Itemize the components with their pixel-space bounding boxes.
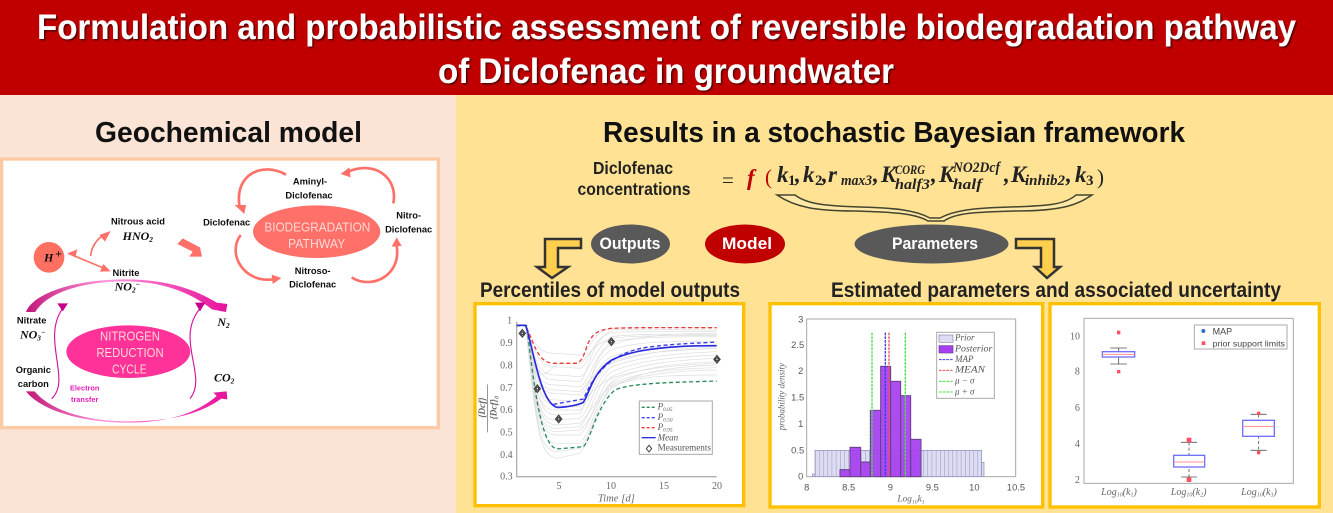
panel: results background: [456, 95, 1333, 513]
formula: ,: [1003, 162, 1010, 187]
axes frame: 8: [1075, 367, 1080, 378]
axes frame: (k: [1123, 487, 1131, 498]
measurements: [519, 330, 720, 423]
biodegradation cycle arrows: [235, 167, 402, 284]
formula: ): [1097, 165, 1104, 189]
heading: percentiles: Percentiles of model outputs: [480, 279, 740, 302]
axes frame: 10: [912, 499, 918, 505]
formula: 1: [788, 173, 796, 189]
formula: r: [828, 162, 838, 187]
nitrogen labels: Nitrous acid: [111, 217, 165, 227]
legend: μ + σ: [954, 386, 975, 396]
legend: 0.05: [663, 407, 673, 413]
axes frame: 10: [1070, 332, 1080, 343]
H+ ion: H: [43, 250, 54, 264]
axes: 0.4: [500, 450, 513, 461]
box k3: [1243, 412, 1274, 454]
axes frame: 2: [798, 366, 803, 376]
legend: [937, 332, 994, 398]
biodegradation pathway ellipse: [253, 205, 380, 258]
axes frame: probability density: [776, 363, 786, 431]
formula: 3: [1086, 173, 1094, 189]
panel: parameter boxplots: [1050, 304, 1319, 507]
ellipse: model: Model: [722, 234, 772, 253]
ellipse: outputs: [591, 224, 670, 264]
formula: CORG: [895, 162, 926, 177]
axes: 0.6: [500, 405, 513, 416]
electron transfer label: Electron: [70, 384, 100, 393]
ellipse: parameters: [854, 224, 1008, 264]
axes: Time [d]: [598, 494, 635, 505]
formula: ,: [930, 162, 937, 187]
legend: [1194, 325, 1287, 349]
axes frame: 9: [888, 482, 893, 492]
nitrous acid and nitrite arrows: [67, 231, 111, 272]
legend: Mean: [657, 432, 679, 442]
axes frame: 1: [798, 419, 803, 429]
nitrogen labels: Organic: [16, 365, 51, 375]
formula: half: [953, 177, 984, 193]
nitrogen labels: Nitrite: [113, 268, 139, 278]
axes frame: 10: [969, 482, 980, 492]
nitrogen labels: 2: [225, 321, 230, 330]
pathway labels: Diclofenac: [285, 191, 333, 201]
axes frame: Log: [1101, 487, 1117, 498]
axes: 0.8: [500, 360, 513, 371]
axes frame: 3: [798, 314, 803, 324]
axes: 1: [507, 315, 512, 326]
axes frame: 9.5: [926, 482, 939, 492]
posterior histogram: [840, 366, 921, 477]
legend: μ − σ: [954, 376, 975, 386]
panel: model outputs chart: [475, 304, 744, 506]
formula: k: [777, 162, 789, 187]
nitrogen labels: carbon: [18, 379, 49, 389]
axes frame: 0: [798, 472, 803, 482]
legend: Measurements: [658, 443, 711, 453]
axes frame: 3: [1269, 493, 1273, 499]
box k2: [1174, 438, 1205, 482]
nitrogen labels: 2: [131, 286, 136, 295]
H+ ion: +: [55, 246, 62, 260]
axes frame: 8.5: [842, 482, 855, 492]
panel: posterior histogram: [770, 304, 1043, 507]
axes frame: 2: [1075, 475, 1080, 486]
nitrogen labels: −: [41, 327, 45, 336]
axes frame: 0.5: [791, 445, 804, 455]
axes: {Dcf}₀: [489, 396, 499, 420]
formula: k: [1075, 162, 1087, 187]
biodegradation pathway ellipse: BIODEGRADATION: [264, 221, 370, 235]
nitrogen cycle bottom arrow: [26, 391, 227, 423]
title text: Formulation and probabilistic assessment of reversible biodegradation pathway: [37, 8, 1296, 47]
formula: [722, 160, 1104, 193]
axes frame: (k: [1263, 487, 1271, 498]
nitrogen cycle top arrow: [26, 279, 227, 312]
pathway labels: Diclofenac: [289, 280, 336, 290]
percentile curves: [517, 325, 717, 449]
nitrogen labels: −: [136, 280, 140, 289]
axes frame: 10: [1257, 493, 1263, 499]
nitrogen reduction ellipse: CYCLE: [112, 362, 147, 376]
axes: 5: [556, 481, 561, 492]
nitrogen labels: NO: [20, 327, 37, 341]
axes frame: [1070, 318, 1293, 499]
axes frame: ): [1272, 487, 1277, 498]
axes frame: 10: [1186, 493, 1192, 499]
electron transfer label: transfer: [71, 395, 98, 404]
legend: MAP: [1213, 327, 1232, 337]
axes frame: ): [1132, 487, 1137, 498]
axes frame: ): [1202, 487, 1207, 498]
formula: ,: [794, 162, 801, 187]
axes frame: 2.5: [791, 340, 804, 350]
axes: 0.3: [500, 472, 513, 483]
axes: 15: [659, 481, 669, 492]
axes frame: 10.5: [1007, 482, 1025, 492]
nitrogen reduction ellipse: REDUCTION: [96, 346, 164, 360]
formula: ,: [1065, 162, 1072, 187]
panel: geochemical background: [0, 95, 456, 513]
nitrogen labels: NO: [115, 280, 132, 294]
ellipse: model: [705, 224, 785, 264]
formula: K: [938, 162, 956, 187]
heading: results: Results in a stochastic Bayesian framework: [603, 117, 1186, 149]
legend: 0.95: [663, 427, 673, 433]
H+ ion: [34, 242, 64, 273]
formula: ,: [872, 162, 879, 187]
axes: 10: [606, 481, 616, 492]
ellipse: outputs: Outputs: [600, 234, 660, 253]
nitrogen labels: Nitrate: [17, 315, 46, 325]
legend: P: [658, 412, 663, 422]
arrow: parameters to estimates: [1016, 239, 1060, 278]
formula: ,: [821, 162, 828, 187]
pathway labels: Diclofenac: [203, 218, 250, 228]
formula: max3: [841, 173, 872, 189]
axes frame: 2: [1200, 493, 1203, 499]
axes frame: 1: [1130, 493, 1133, 499]
axes frame: 8: [804, 482, 809, 492]
formula: k: [803, 162, 815, 187]
axes: 0.5: [500, 428, 513, 439]
nitrogen labels: [16, 217, 235, 389]
box k1: [1102, 331, 1135, 373]
heading: estimated parameters: Estimated parameters and associated uncertainty: [831, 279, 1281, 302]
arrow: outputs to percentiles: [537, 239, 581, 278]
pathway labels: Aminyl-: [293, 176, 327, 186]
axes: 0.7: [500, 383, 513, 394]
title text: of Diclofenac in groundwater: [438, 52, 894, 91]
formula: half3: [895, 177, 931, 193]
axes frame: Log: [897, 495, 912, 505]
formula: =: [722, 168, 734, 192]
formula: (: [765, 165, 772, 189]
panel: geochemical diagram: [2, 159, 438, 428]
formula: K: [1010, 162, 1028, 187]
legend: [639, 401, 712, 454]
axes frame: 10: [1117, 493, 1123, 499]
title banner: [0, 0, 1333, 95]
axes frame: Log: [1171, 487, 1186, 498]
pathway labels: Nitroso-: [295, 266, 331, 276]
text: diclofenac concentrations: Diclofenac: [593, 158, 673, 178]
heading: geochemical model: Geochemical model: [95, 117, 362, 149]
axes frame: Log: [1241, 487, 1257, 498]
nitrogen labels: 3: [36, 333, 41, 342]
nitrogen labels: CO: [214, 370, 231, 384]
axes frame: 6: [1075, 403, 1080, 414]
axes frame: (k: [1192, 487, 1201, 498]
prior histogram: [812, 450, 984, 477]
legend: Posterior: [954, 343, 993, 353]
nitrogen labels: 2: [230, 376, 235, 385]
formula: f: [747, 165, 757, 190]
legend: P: [658, 422, 663, 432]
brace under parameters: [777, 195, 1092, 221]
axes: 20: [712, 481, 722, 492]
pathway labels: [203, 176, 432, 290]
legend: prior support limits: [1213, 338, 1285, 348]
formula: NO2Dcf: [952, 160, 1002, 176]
legend: 0.50: [663, 417, 673, 423]
axes: [478, 315, 722, 505]
title text: [37, 8, 1296, 91]
nitrogen reduction ellipse: [66, 325, 190, 378]
formula: 2: [815, 173, 822, 189]
axes: {Dcf}: [478, 397, 488, 418]
pathway labels: Nitro-: [396, 211, 421, 221]
ellipse: parameters: Parameters: [892, 234, 978, 253]
ensemble lines: [517, 325, 717, 458]
legend: MEAN: [954, 365, 986, 375]
axes frame: 1.5: [791, 392, 804, 402]
biodegradation pathway ellipse: PATHWAY: [288, 237, 346, 251]
axes frame: 4: [1075, 439, 1080, 450]
legend: MAP: [954, 354, 974, 364]
axes frame: k: [918, 495, 923, 505]
formula: inhib2: [1025, 173, 1065, 189]
nitrogen labels: N: [217, 315, 226, 329]
nitrogen labels: 2: [148, 235, 153, 244]
pathway labels: Diclofenac: [385, 224, 432, 234]
nitrogen reduction ellipse: NITROGEN: [100, 329, 160, 343]
electron transfer label: [70, 384, 100, 404]
text: diclofenac concentrations: [578, 158, 691, 199]
statistics lines: [872, 333, 905, 477]
text: diclofenac concentrations: concentrations: [578, 179, 691, 199]
axes frame: 1: [922, 499, 925, 505]
nitrogen labels: HNO: [123, 229, 149, 243]
axes frame: [776, 314, 1025, 505]
legend: P: [658, 402, 663, 412]
axes: 0.9: [500, 338, 513, 349]
legend: Prior: [954, 333, 975, 343]
arrow: nitrous acid to diclofenac: [177, 238, 202, 257]
electron transfer arrows: [52, 303, 205, 399]
formula: K: [880, 162, 898, 187]
